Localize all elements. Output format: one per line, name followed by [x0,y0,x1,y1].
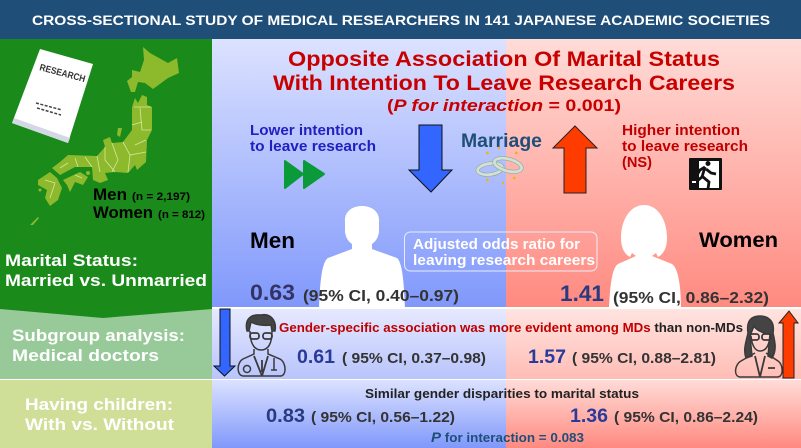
icon: male doctor [238,315,285,376]
marital status label [5,251,207,290]
children men odds ratio: ( 95% CI, 0.56–1.22) [311,409,455,426]
higher intention text [622,123,748,171]
children men odds ratio: 0.83 [266,405,305,427]
doctors women odds ratio: 1.57 [528,346,566,368]
arrow: small blue down [214,309,235,376]
panel: subgroup medical doctors left label: Subgroup analysis: [12,326,185,345]
lower intention text: to leave research [250,139,376,155]
panel: children red [506,380,801,448]
higher intention text: to leave research [622,139,748,155]
children women odds ratio: ( 95% CI, 0.86–2.24) [614,409,758,426]
icon: man silhouette [319,206,405,309]
arrow: red up [553,126,597,193]
panel: having children left label [0,380,212,448]
doctors men odds ratio: 0.61 [297,346,335,368]
icon: female doctor [736,316,782,377]
children men odds ratio [266,405,455,427]
doctors women odds ratio: ( 95% CI, 0.88–2.81) [572,350,716,367]
icon: emergency exit [689,158,722,190]
main heading: Opposite Association Of Marital Status [288,47,720,71]
panel: subgroup medical doctors left label: Medical doctors [12,346,159,365]
men odds ratio: 0.63 [250,280,295,305]
sample sizes: Women [93,203,153,222]
marital status label: Married vs. Unmarried [5,271,207,290]
panel: main blue men side [212,39,506,307]
icon: research document: RESEARCH [38,62,87,85]
arrow: blue down [409,125,452,192]
main heading: (P for interaction = 0.001) [387,97,621,115]
main heading: With Intention To Leave Research Careers [273,71,735,95]
p for interaction children: P for interaction = 0.083 [431,429,584,445]
panel: subgroup red [506,309,801,379]
marital status label: Marital Status: [5,251,138,270]
panel: subgroup medical doctors left label [0,306,212,379]
higher intention text: (NS) [622,155,652,171]
doctors women odds ratio [528,346,716,368]
sample sizes: (n = 812) [158,209,205,221]
icon: map of Japan [30,47,179,225]
men label: Men [250,228,295,253]
sample sizes [93,185,205,222]
doctors men odds ratio [297,346,486,368]
women odds ratio: 1.41 [560,281,604,306]
women label: Women [699,228,778,252]
icon: green fast-forward [285,161,324,188]
icon: wedding rings [477,148,523,183]
women odds ratio: (95% CI, 0.86–2.32) [613,290,769,307]
panel: marital status green [0,39,212,318]
lower intention text [250,123,376,155]
callout: adjusted odds ratio [404,232,597,271]
children statement: Similar gender disparities to marital status [365,386,639,401]
lower intention text: Lower intention [250,123,363,139]
sample sizes: Men [93,185,127,204]
children women odds ratio: 1.36 [570,405,608,427]
arrow: small red up [779,311,798,378]
callout: adjusted odds ratio: leaving research careers [413,253,595,269]
panel: subgroup blue [212,309,506,379]
men odds ratio: (95% CI, 0.40–0.97) [303,288,459,305]
callout: adjusted odds ratio: Adjusted odds ratio for [413,237,580,253]
children women odds ratio [570,405,758,427]
header banner: CROSS-SECTIONAL STUDY OF MEDICAL RESEARCHERS IN 141 JAPANESE ACADEMIC SOCIETIES [32,13,770,28]
sample sizes: (n = 2,197) [132,191,190,203]
header banner [0,0,801,39]
icon: research document [12,49,93,143]
men odds ratio [250,280,459,305]
marriage label: Marriage [461,130,542,152]
subgroup statement: Gender-specific association was more evident among MDs than non-MDs [279,320,743,335]
panel: children blue [212,380,506,448]
icon: woman silhouette [609,205,681,309]
doctors men odds ratio: ( 95% CI, 0.37–0.98) [342,350,486,367]
main heading [273,47,735,115]
panel: having children left label: With vs. Without [25,415,174,434]
panel: main red women side [506,39,801,307]
women odds ratio [560,281,769,307]
panel: having children left label: Having children: [25,395,173,414]
higher intention text: Higher intention [622,123,740,139]
